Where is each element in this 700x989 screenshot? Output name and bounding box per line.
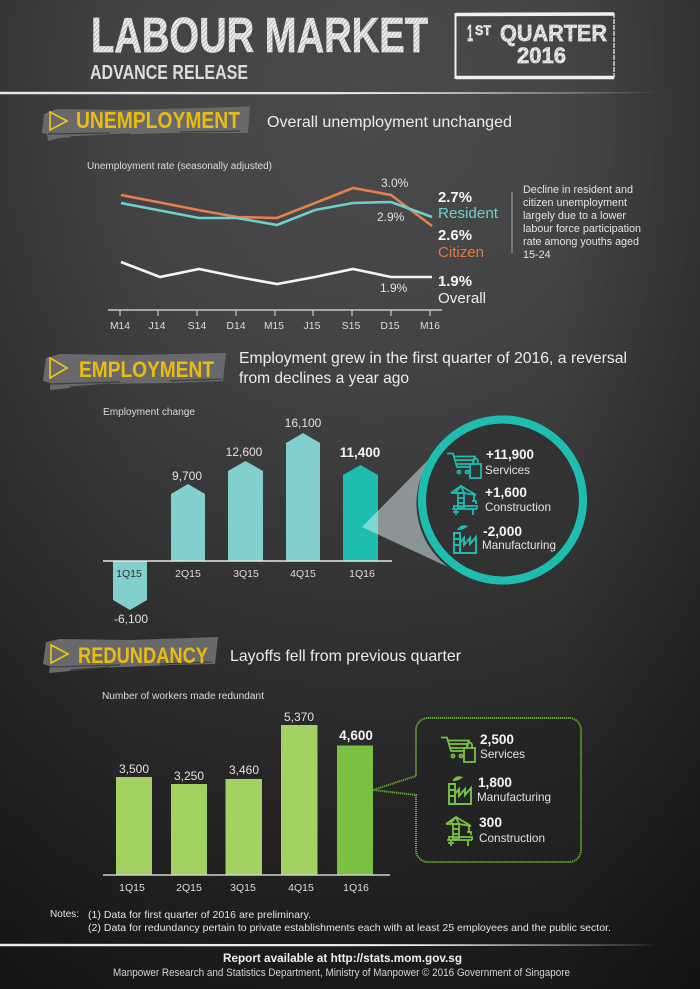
quarter badge: 1: [467, 20, 473, 46]
manufacturing: 1,800: [478, 775, 512, 790]
quarter badge: [456, 13, 614, 79]
construction: [446, 815, 545, 846]
value labels: 4,600: [339, 728, 373, 743]
axis labels: J15: [304, 320, 321, 332]
heading text: Layoffs fell from previous quarter: [230, 648, 462, 665]
notes: Notes:: [50, 908, 79, 920]
axis labels: M15: [264, 320, 284, 332]
category labels: 3Q15: [230, 882, 256, 894]
category labels: [119, 882, 369, 894]
category labels: 1Q15: [116, 568, 142, 580]
value labels: 3,500: [119, 762, 149, 776]
services: [447, 447, 534, 478]
side note: rate among youths aged: [523, 236, 639, 248]
category labels: 1Q16: [349, 568, 375, 580]
heading text: from declines a year ago: [239, 370, 409, 387]
side note: labour force participation: [523, 223, 641, 235]
category labels: 3Q15: [233, 568, 259, 580]
heading: employment: EMPLOYMENT: [79, 357, 214, 382]
construction: [451, 485, 551, 515]
manufacturing: Manufacturing: [477, 790, 551, 804]
line: citizen: [121, 188, 432, 226]
side note: 15-24: [523, 249, 551, 261]
axis labels: M16: [420, 320, 440, 332]
heading: redundancy: REDUNDANCY: [78, 643, 208, 668]
line chart: [87, 161, 499, 332]
quarter badge: QUARTER: [500, 20, 607, 46]
category labels: 4Q15: [290, 568, 316, 580]
chart label: Unemployment rate (seasonally adjusted): [87, 161, 272, 172]
manufacturing: Manufacturing: [482, 538, 556, 552]
section: unemployment: [42, 106, 641, 332]
axis: [108, 310, 442, 316]
services: +11,900: [486, 447, 534, 462]
construction: 300: [479, 815, 502, 830]
side note: citizen unemployment: [523, 197, 627, 209]
subtitle: advance release: ADVANCE RELEASE: [90, 62, 248, 84]
manufacturing: [449, 775, 551, 804]
point labels: 2.9%: [377, 210, 405, 224]
manufacturing: -2,000: [483, 524, 522, 539]
footer: Manpower Research and Statistics Department, Ministry of Manpower © 2016 Government of Singapore: [113, 967, 570, 979]
axis labels: S15: [342, 320, 360, 332]
value labels: 12,600: [226, 445, 263, 459]
category labels: 4Q15: [288, 882, 314, 894]
axis labels: [110, 320, 440, 332]
bar chart: employment change: [103, 407, 392, 626]
bar chart: workers made redundant: [102, 691, 390, 894]
value labels: 16,100: [285, 416, 322, 430]
side note: Decline in resident and: [523, 184, 633, 196]
point labels: 3.0%: [381, 176, 409, 190]
category labels: 1Q15: [119, 882, 145, 894]
line: resident: [121, 202, 432, 225]
category labels: 2Q15: [175, 568, 201, 580]
series labels: 2.6%: [438, 227, 472, 244]
manufacturing: [454, 524, 556, 553]
value labels: 3,460: [229, 763, 259, 777]
notes: (2) Data for redundancy pertain to private establishments each with at least 25 employees and the public sector.: [88, 922, 611, 934]
category labels: 2Q15: [176, 882, 202, 894]
side note: largely due to a lower: [523, 210, 626, 222]
axis labels: M14: [110, 320, 130, 332]
heading: redundancy: [43, 637, 218, 673]
notes: [50, 908, 611, 934]
series labels: Overall: [438, 290, 486, 307]
axis labels: D15: [380, 320, 400, 332]
services: Services: [485, 463, 530, 477]
heading: employment: [43, 353, 226, 390]
series labels: 1.9%: [438, 273, 472, 290]
series labels: Citizen: [438, 244, 484, 261]
value labels: 5,370: [284, 710, 314, 724]
value labels: 11,400: [340, 445, 380, 460]
notes: (1) Data for first quarter of 2016 are preliminary.: [88, 909, 311, 921]
point labels: [377, 176, 409, 295]
callout cone: [362, 456, 448, 567]
heading text: Overall unemployment unchanged: [267, 114, 512, 131]
services: 2,500: [480, 732, 514, 747]
side note: [512, 184, 641, 261]
section: employment: [43, 350, 627, 626]
breakdown circle: [362, 420, 583, 580]
construction: +1,600: [485, 485, 527, 500]
axis labels: S14: [188, 320, 206, 332]
chart label: Number of workers made redundant: [102, 691, 264, 702]
services: [441, 732, 525, 762]
heading text: Employment grew in the first quarter of 2016, a reversal: [239, 350, 627, 367]
series labels: Resident: [438, 205, 499, 222]
value labels: [114, 416, 380, 626]
heading: unemployment: UNEMPLOYMENT: [76, 107, 240, 133]
value labels: [119, 710, 373, 783]
axis labels: D14: [226, 320, 246, 332]
bars: [116, 725, 373, 875]
value labels: 9,700: [172, 469, 202, 483]
chart label: Employment change: [103, 407, 195, 418]
series labels: 2.7%: [438, 189, 472, 206]
footer: Report available at http://stats.mom.gov.sg: [223, 951, 462, 965]
bars: [113, 433, 378, 610]
quarter badge: 2016: [517, 43, 566, 68]
construction: Construction: [485, 500, 551, 514]
title: LABOUR MARKET: [91, 9, 428, 63]
value labels: -6,100: [114, 612, 148, 626]
footer: [113, 951, 570, 979]
line: overall: [121, 262, 432, 284]
point labels: 1.9%: [380, 281, 408, 295]
services: Services: [480, 747, 525, 761]
section: redundancy: [43, 637, 581, 894]
axis labels: J14: [149, 320, 166, 332]
breakdown callout: [373, 718, 581, 862]
value labels: 3,250: [174, 769, 204, 783]
construction: Construction: [479, 831, 545, 845]
category labels: 1Q16: [343, 882, 369, 894]
category labels: [116, 568, 375, 580]
heading: unemployment: [42, 106, 250, 141]
header: [90, 9, 614, 84]
series labels: [438, 189, 499, 307]
quarter badge: ST: [475, 22, 491, 38]
heading text: [239, 350, 627, 387]
